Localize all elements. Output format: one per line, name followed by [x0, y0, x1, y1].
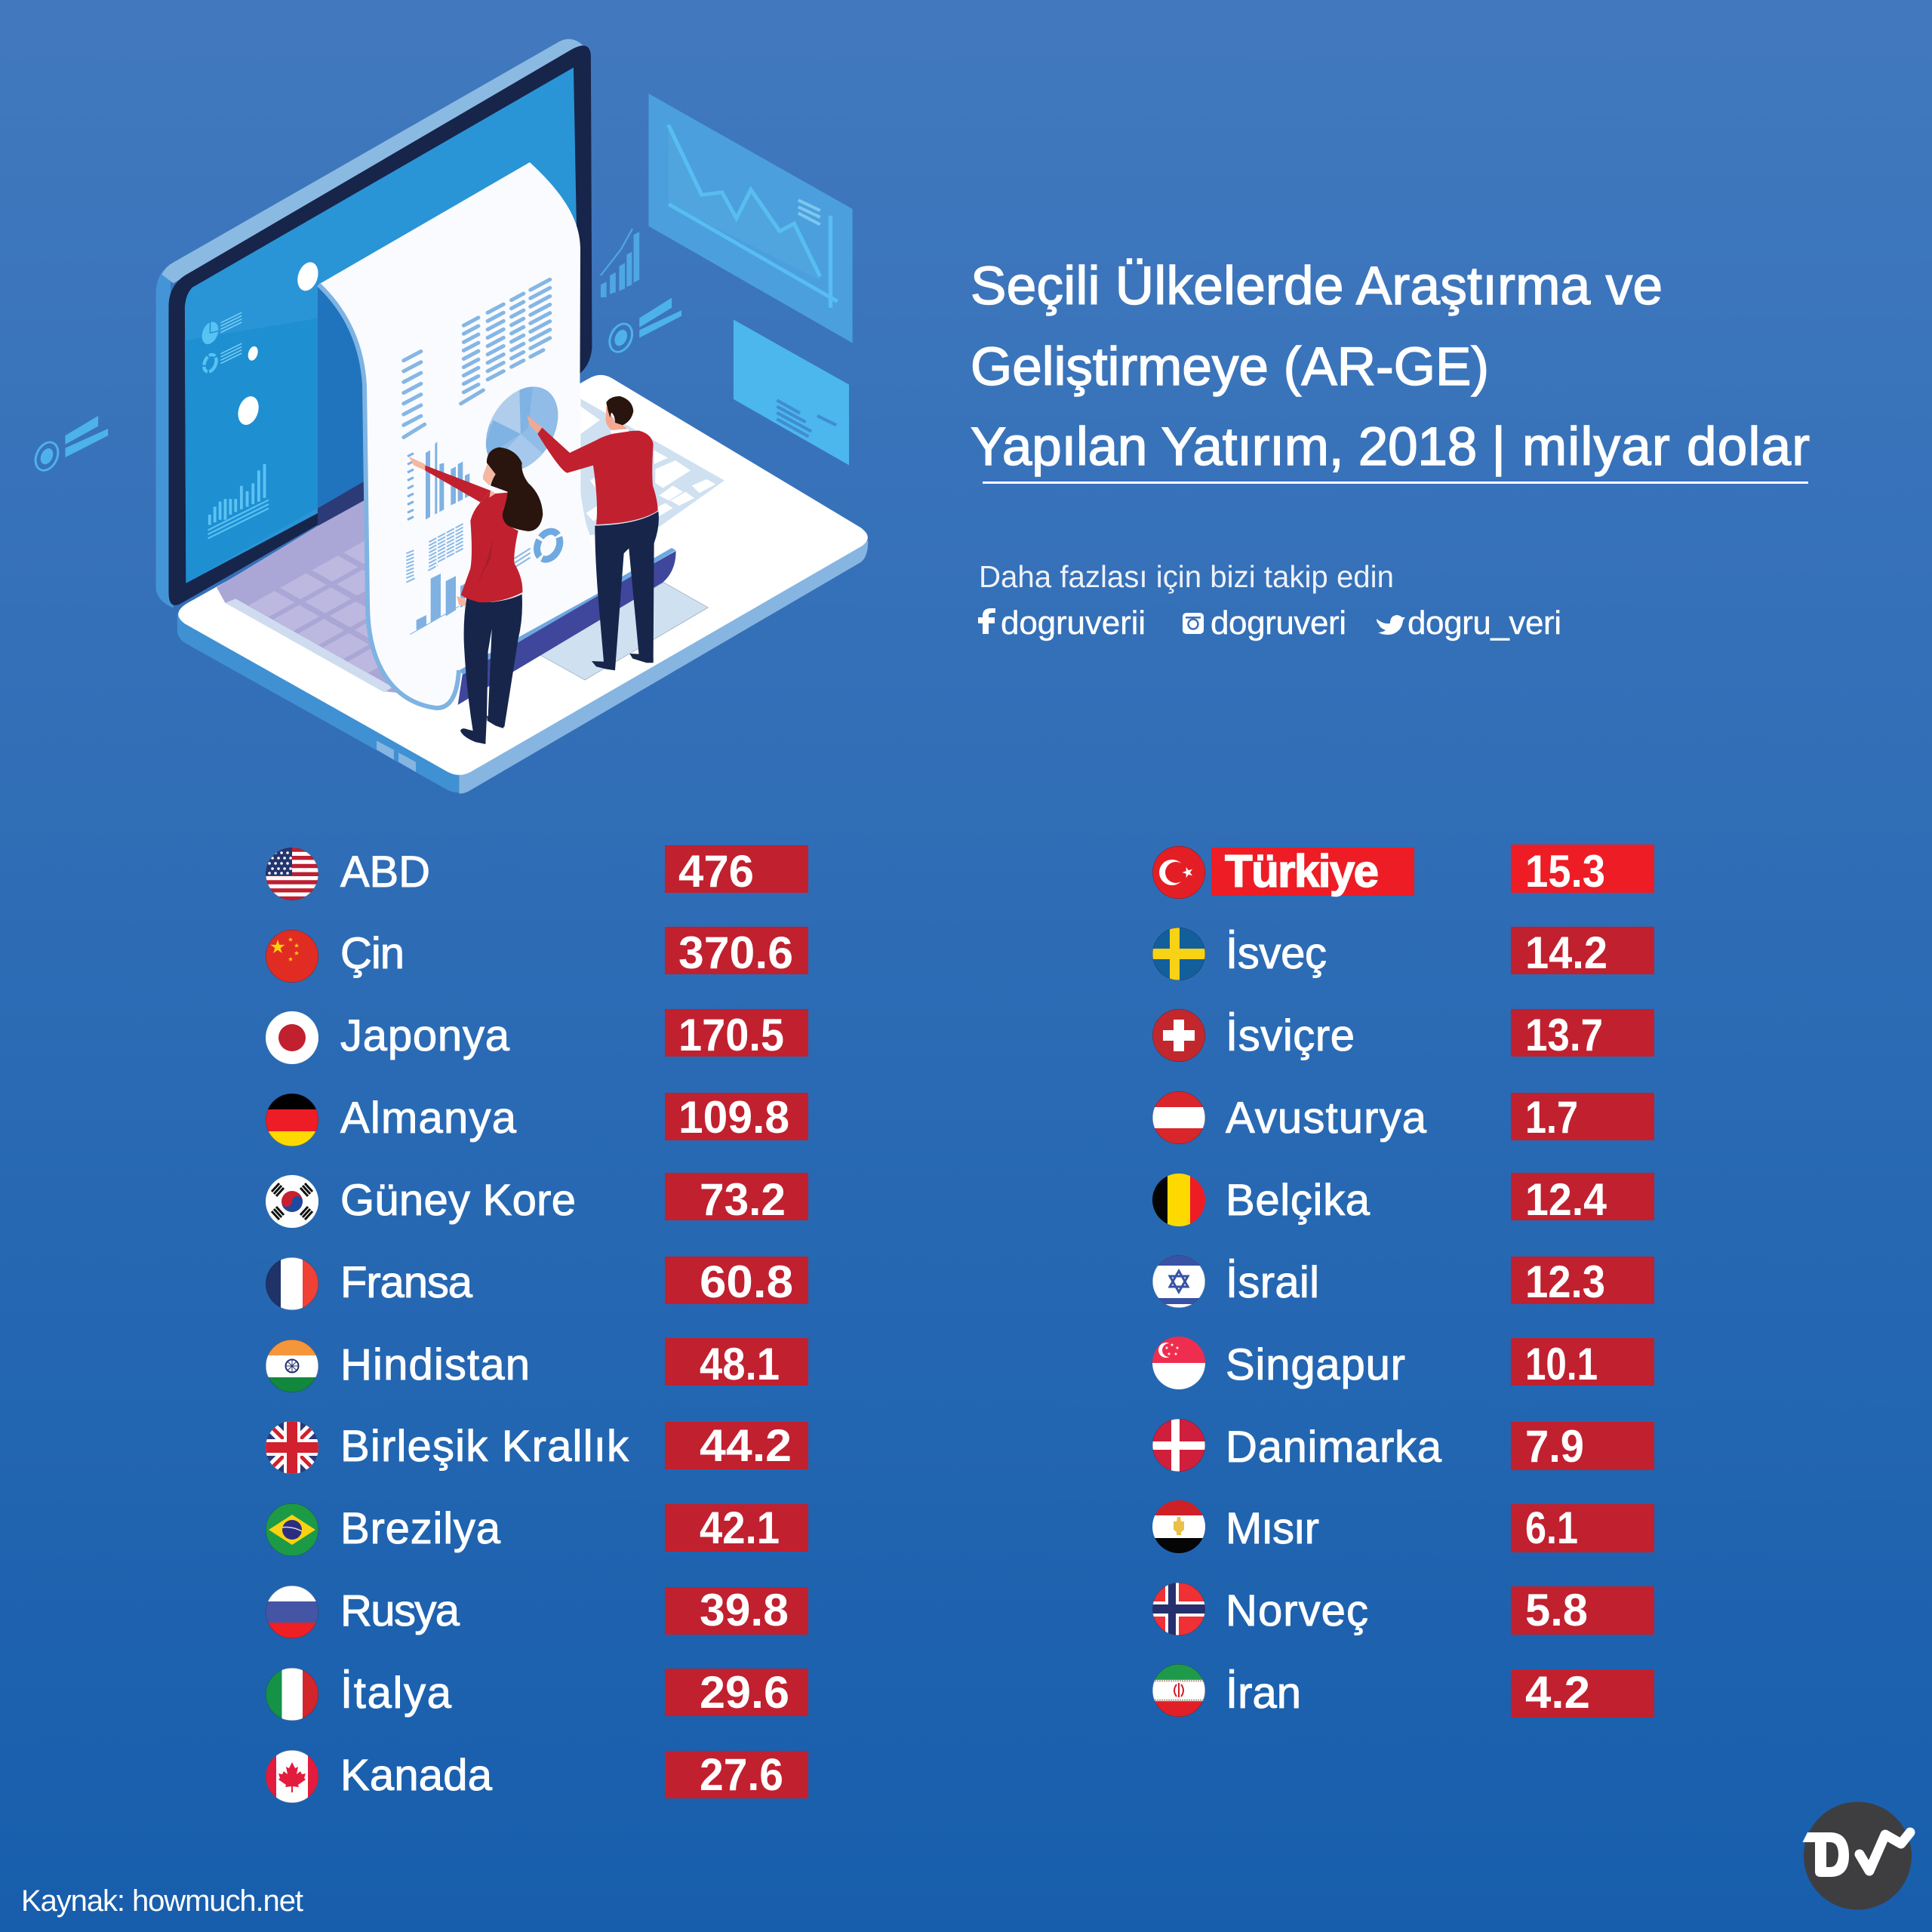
value — [665, 1420, 808, 1471]
value: 370.6 — [678, 928, 793, 978]
screen bar chart — [208, 464, 269, 538]
row: Danimarka — [1152, 1419, 1654, 1472]
flag: Norway — [1152, 1583, 1205, 1635]
laptop base — [177, 375, 868, 794]
floating text panel — [734, 320, 849, 465]
flag: Singapore — [1152, 1337, 1205, 1389]
flag: Sweden — [1152, 928, 1205, 980]
instagram handle: dogruveri — [1211, 605, 1346, 641]
value — [1511, 1257, 1654, 1307]
flag: Germany — [266, 1094, 318, 1146]
row: Fransa — [266, 1257, 808, 1310]
name: Danimarka — [1226, 1423, 1442, 1472]
row: Birleşik Krallık — [266, 1420, 808, 1474]
flag: Switzerland — [1152, 1009, 1205, 1062]
name: İtalya — [340, 1669, 452, 1718]
laptop lid — [156, 39, 592, 608]
person: woman — [409, 448, 543, 744]
name: İsveç — [1226, 929, 1327, 978]
value: 39.8 — [700, 1585, 789, 1635]
icon: instagram — [1183, 613, 1204, 634]
source: Kaynak: howmuch.net — [21, 1884, 303, 1918]
row: İran — [1152, 1664, 1654, 1718]
flag: Italy — [266, 1668, 318, 1721]
row: Güney Kore — [266, 1173, 808, 1228]
row: İsviçre — [1152, 1009, 1654, 1062]
value — [1511, 1585, 1654, 1635]
value: 14.2 — [1525, 928, 1607, 978]
screen pie and donut icons — [199, 312, 242, 374]
value — [1511, 1009, 1654, 1060]
flag: South Korea — [266, 1175, 318, 1228]
row: İtalya — [266, 1667, 808, 1721]
name: Japonya — [340, 1011, 510, 1060]
icon: twitter — [1377, 615, 1405, 635]
name: Birleşik Krallık — [340, 1422, 629, 1471]
value: 109.8 — [678, 1092, 789, 1143]
row: Mısır — [1152, 1500, 1654, 1553]
flag: Belgium — [1152, 1174, 1205, 1226]
name: Fransa — [340, 1258, 473, 1307]
logo: DV — [1802, 1802, 1912, 1909]
flag: United Kingdom — [266, 1421, 318, 1474]
value — [665, 1257, 808, 1307]
value: 12.3 — [1525, 1257, 1605, 1307]
flag: Turkey — [1152, 846, 1205, 899]
value: 60.8 — [700, 1257, 793, 1307]
value: 29.6 — [700, 1667, 789, 1718]
title: milyar dolar — [1522, 417, 1810, 477]
value: 10.1 — [1525, 1339, 1598, 1389]
value — [665, 1667, 808, 1718]
title — [971, 257, 1810, 484]
row: İsrail — [1152, 1255, 1654, 1308]
right column — [1152, 844, 1654, 1718]
value — [1511, 1092, 1654, 1143]
paper lower bars — [410, 574, 466, 635]
value: 12.4 — [1525, 1174, 1607, 1225]
row: Norveç — [1152, 1583, 1654, 1635]
left column — [266, 845, 808, 1803]
row: Rusya — [266, 1585, 808, 1638]
white dots on screen — [235, 260, 321, 427]
row: Brezilya — [266, 1503, 808, 1556]
row: Türkiye — [1152, 844, 1654, 899]
value: 44.2 — [700, 1420, 792, 1471]
name: İsrail — [1226, 1258, 1319, 1307]
row: Kanada — [266, 1749, 808, 1803]
name: İsviçre — [1226, 1011, 1355, 1060]
flag: China — [266, 930, 318, 983]
name: Rusya — [340, 1586, 460, 1635]
laptop keyboard right — [580, 398, 724, 535]
value: 15.3 — [1525, 846, 1605, 897]
row: Avusturya — [1152, 1091, 1654, 1144]
twitter handle: dogru_veri — [1407, 605, 1561, 641]
floating mini bar chart icon — [601, 229, 639, 297]
screen lower tone and shadow — [185, 283, 370, 583]
value — [1511, 1173, 1654, 1225]
value: 476 — [678, 846, 754, 897]
value: 1.7 — [1525, 1092, 1578, 1143]
value — [665, 1585, 808, 1635]
icon: facebook — [978, 608, 995, 634]
flag: Denmark — [1152, 1419, 1205, 1472]
value: 42.1 — [700, 1503, 780, 1553]
flag: Russia — [266, 1586, 318, 1638]
flag: Austria — [1152, 1091, 1205, 1144]
value: 5.8 — [1525, 1585, 1588, 1635]
row: Belçika — [1152, 1173, 1654, 1226]
value: 48.1 — [700, 1339, 780, 1389]
flag: Iran — [1152, 1664, 1205, 1717]
follow text: Daha fazlası için bizi takip edin — [979, 559, 1394, 594]
paper bar chart — [408, 441, 469, 520]
report paper — [318, 162, 604, 708]
floating target icon left — [32, 416, 108, 473]
name: Kanada — [340, 1751, 493, 1800]
value — [665, 845, 808, 897]
value — [1511, 1503, 1654, 1553]
person: man — [527, 396, 659, 670]
flag: Egypt — [1152, 1500, 1205, 1553]
name: ABD — [340, 848, 430, 897]
name: Mısır — [1226, 1504, 1319, 1553]
name: Çin — [340, 929, 405, 978]
laptop hinge — [458, 548, 676, 705]
value — [1511, 1667, 1654, 1718]
flag: India — [266, 1340, 318, 1392]
row: Çin — [266, 927, 808, 983]
value: 7.9 — [1525, 1421, 1584, 1472]
title: Seçili Ülkelerde Araştırma ve — [971, 257, 1663, 316]
name: Güney Kore — [340, 1176, 576, 1225]
illustration: laptop with report and two people — [32, 39, 868, 794]
name: Brezilya — [340, 1504, 501, 1553]
value — [1511, 1421, 1654, 1472]
value — [1511, 927, 1654, 978]
value — [1511, 844, 1654, 897]
flag: Japan — [266, 1011, 318, 1064]
value: 13.7 — [1525, 1010, 1603, 1060]
name: Hindistan — [340, 1340, 530, 1389]
value — [665, 1749, 808, 1800]
flag: USA — [266, 848, 318, 900]
row: Hindistan — [266, 1338, 808, 1392]
title: Geliştirmeye (AR-GE) — [971, 337, 1489, 397]
value: 6.1 — [1525, 1503, 1578, 1553]
row: ABD — [266, 845, 808, 900]
title: Yapılan Yatırım, 2018 | — [971, 417, 1506, 477]
value: 4.2 — [1525, 1667, 1590, 1718]
flag: France — [266, 1257, 318, 1310]
name highlight: Türkiye — [1225, 846, 1379, 897]
keyboard reflection — [217, 499, 408, 694]
name: Belçika — [1226, 1176, 1371, 1225]
name: Singapur — [1226, 1340, 1405, 1389]
floating target icon right — [605, 298, 681, 355]
row: Japonya — [266, 1009, 808, 1064]
row: İsveç — [1152, 927, 1654, 980]
value: 170.5 — [678, 1010, 784, 1060]
row: Almanya — [266, 1092, 808, 1146]
flag: Brazil — [266, 1503, 318, 1556]
paper table lines — [404, 275, 557, 437]
name: İran — [1226, 1669, 1301, 1718]
row: Singapur — [1152, 1337, 1654, 1389]
value: 73.2 — [700, 1174, 786, 1225]
name: Avusturya — [1226, 1094, 1427, 1143]
value — [665, 1503, 808, 1553]
paper small tables — [406, 523, 531, 583]
value — [665, 1338, 808, 1389]
floating chart panel — [648, 94, 853, 343]
name: Norveç — [1226, 1586, 1368, 1635]
flag: Israel — [1152, 1255, 1205, 1308]
flag: Canada — [266, 1750, 318, 1803]
facebook handle: dogruverii — [1001, 605, 1146, 641]
value — [1511, 1338, 1654, 1389]
value — [665, 1173, 808, 1225]
name: Almanya — [340, 1094, 517, 1143]
value: 27.6 — [700, 1749, 783, 1800]
social follow block — [978, 559, 1561, 641]
laptop touchpad — [538, 583, 708, 680]
paper pie chart — [486, 386, 558, 469]
laptop screen — [185, 68, 580, 583]
paper donut — [533, 528, 564, 563]
